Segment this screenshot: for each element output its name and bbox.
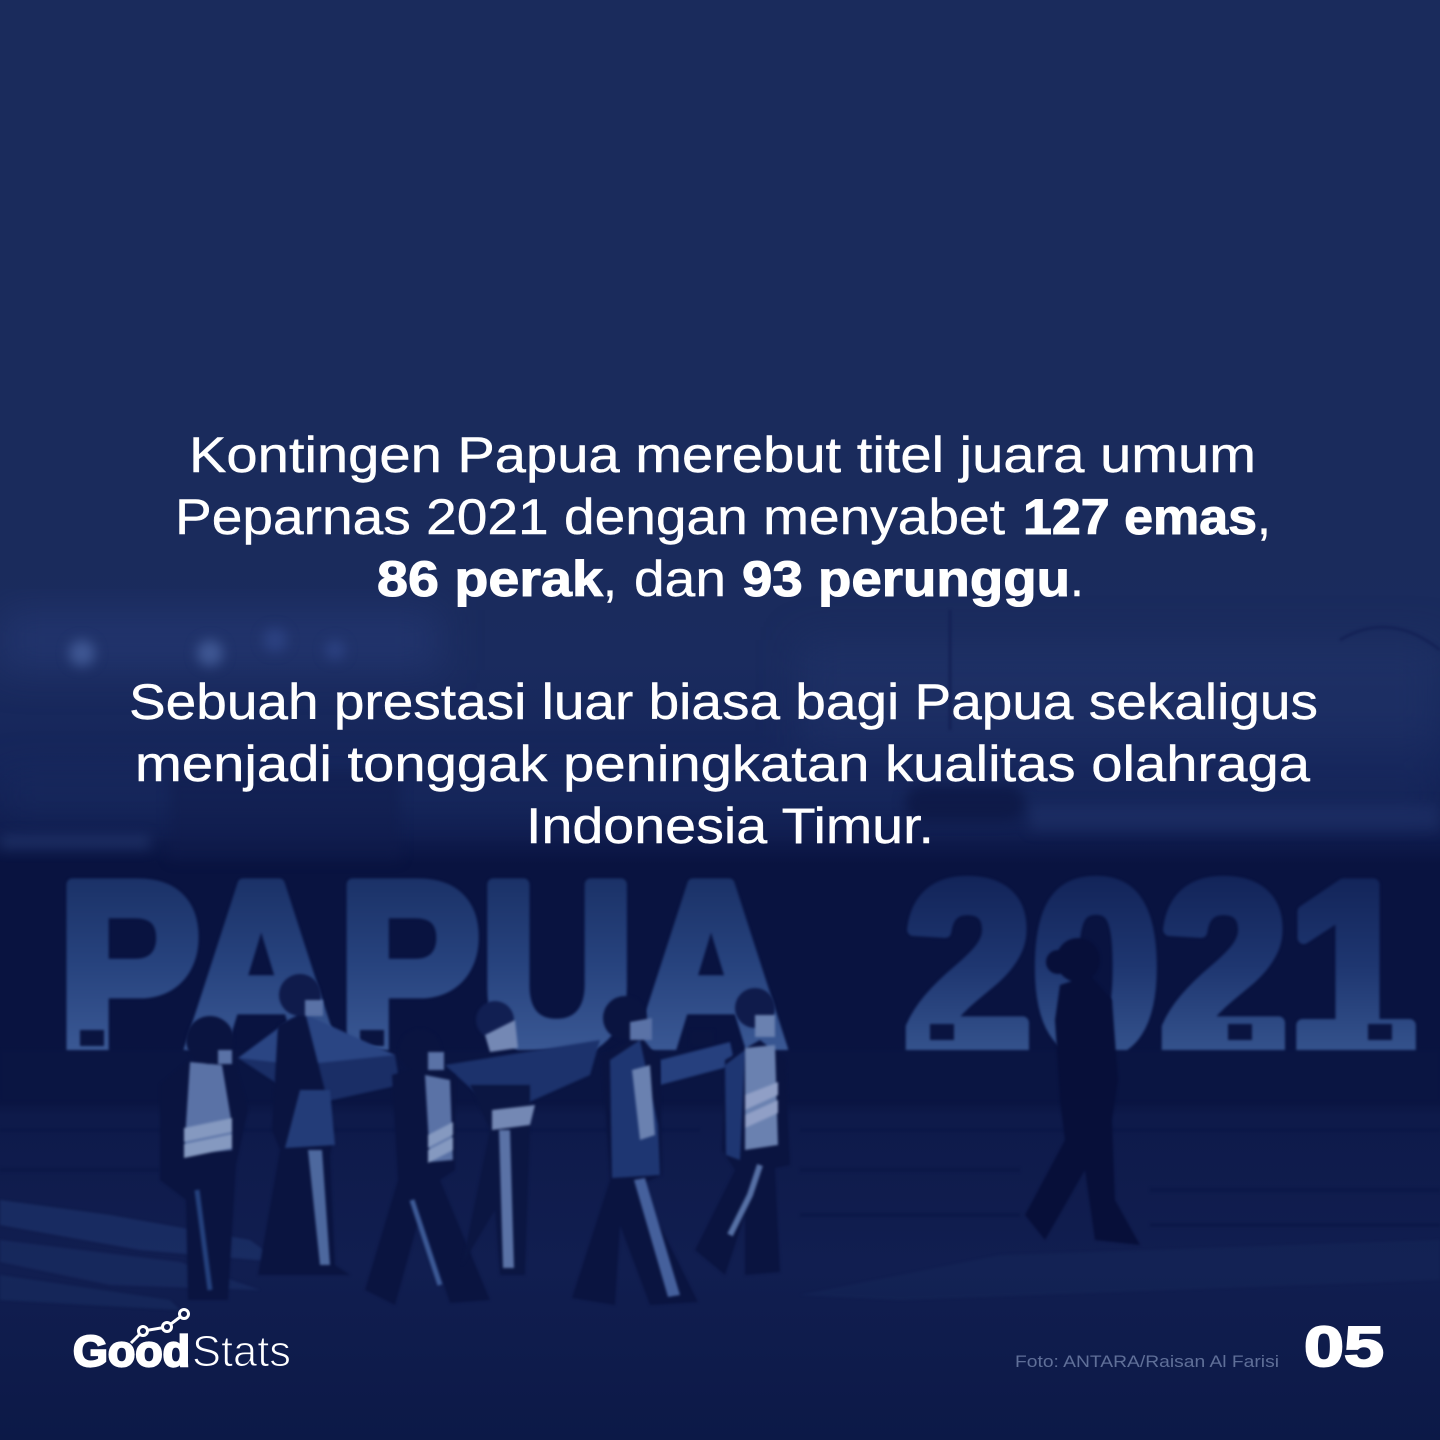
background photo: person 2 xyxy=(258,974,350,1275)
background photo: person 4 xyxy=(462,1001,535,1275)
logo: GoodStats: Good xyxy=(73,1327,190,1376)
background photo: PAPUA 2021 letters: PAPUA xyxy=(58,833,788,1101)
paragraph one xyxy=(175,427,1271,607)
paragraph two: Indonesia Timur. xyxy=(526,798,934,854)
paragraph one: 86 perak xyxy=(377,551,603,607)
paragraph one: 93 perunggu xyxy=(742,551,1070,607)
background photo: flag carried by the group xyxy=(238,1012,735,1115)
paragraph one: Peparnas 2021 dengan menyabet xyxy=(175,489,1005,545)
background photo: ground texture and shadows xyxy=(0,1130,1440,1310)
paragraph two xyxy=(129,674,1318,854)
logo: GoodStats: Stats xyxy=(192,1327,291,1376)
paragraph one: Kontingen Papua merebut titel juara umum xyxy=(189,427,1256,483)
photo credit: Foto: ANTARA/Raisan Al Farisi xyxy=(1015,1352,1279,1371)
logo icon: trend line xyxy=(131,1310,188,1343)
paragraph one: 127 emas xyxy=(1023,489,1257,545)
background photo: person 5 xyxy=(572,996,698,1305)
paragraph one: . xyxy=(1070,551,1084,607)
background photo: person 6 xyxy=(695,988,790,1275)
background photo: walking person xyxy=(1025,938,1140,1245)
background photo: person 1 xyxy=(160,1016,248,1300)
paragraph two: Sebuah prestasi luar biasa bagi Papua sekaligus xyxy=(129,674,1318,730)
paragraph one: , xyxy=(1257,489,1271,545)
logo: GoodStats xyxy=(73,1310,291,1376)
page number: 05 xyxy=(1304,1315,1384,1379)
background photo: PAPUA 2021 letters: 2021 xyxy=(904,833,1416,1101)
background photo: person 3 xyxy=(365,1029,490,1305)
main text xyxy=(129,427,1318,854)
background photo: blurred stadium xyxy=(0,610,1440,860)
paragraph one: , xyxy=(603,551,617,607)
paragraph one: dan xyxy=(634,551,726,607)
paragraph two: menjadi tonggak peningkatan kualitas olahraga xyxy=(135,736,1310,792)
background photo: PAPUA 2021 letters xyxy=(0,833,1440,1102)
